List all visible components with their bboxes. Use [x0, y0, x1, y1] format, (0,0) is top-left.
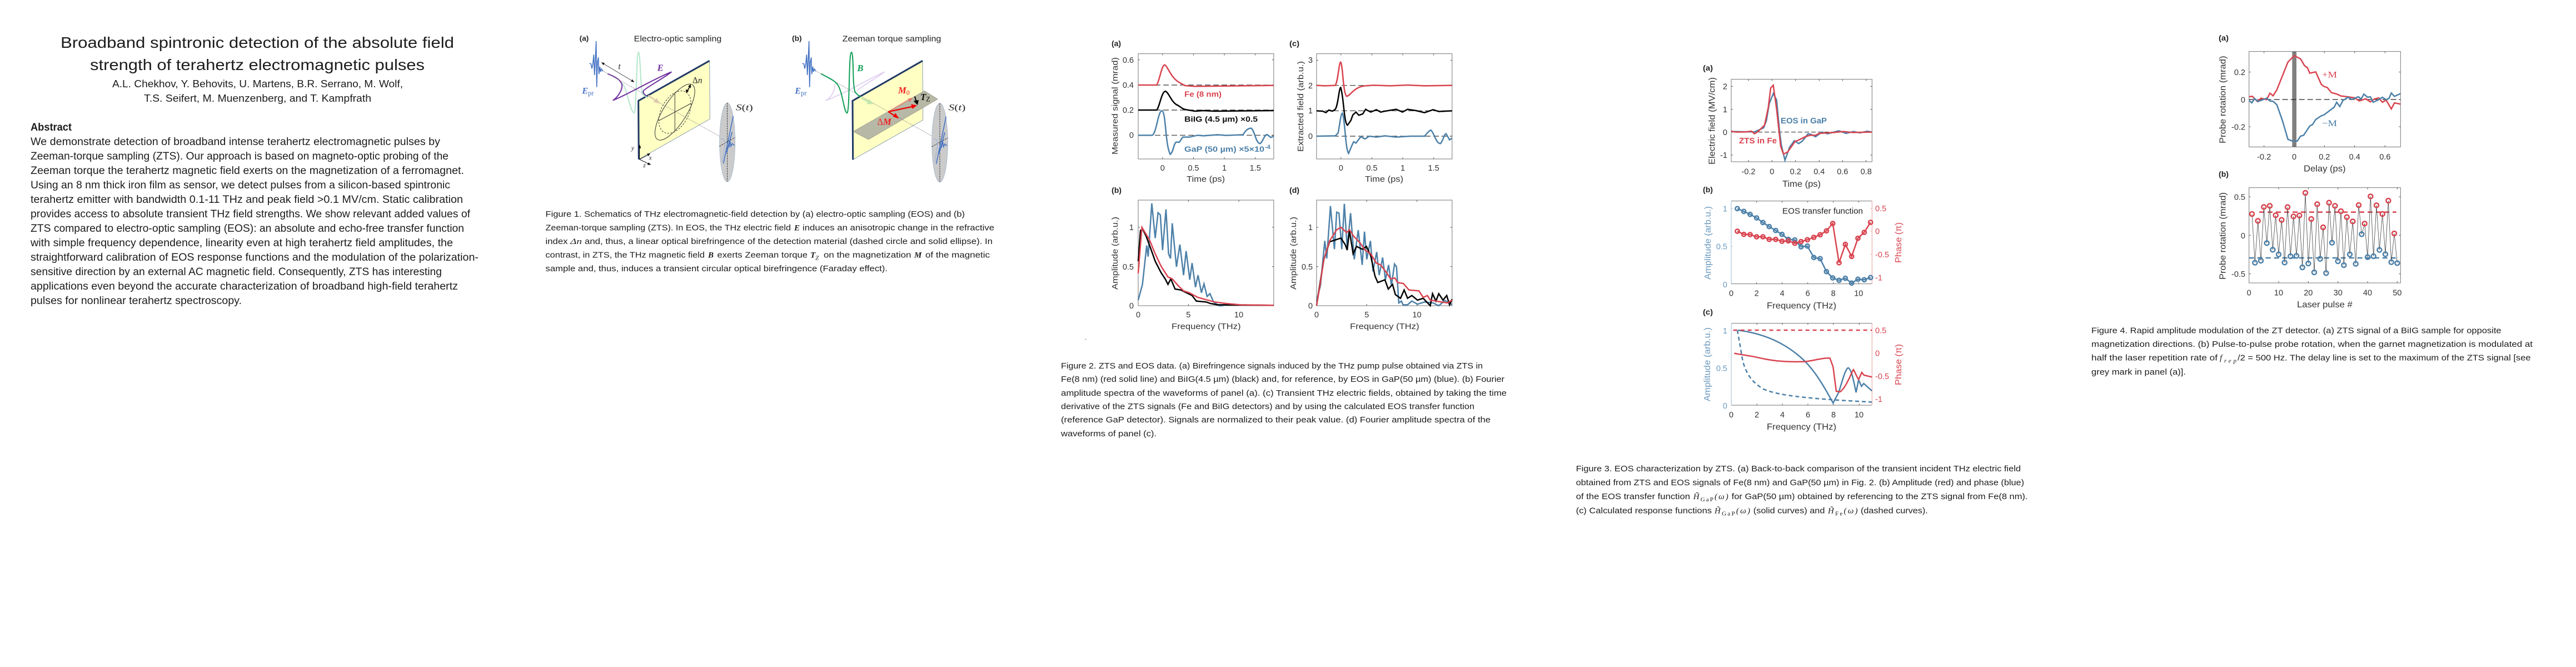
tick labels: 0.5 [1123, 263, 1134, 272]
panel label b: (b) [792, 34, 802, 43]
figure 1 caption: T [810, 251, 816, 260]
right axis label: Phase (π) [1894, 344, 1904, 385]
tick labels: 10 [1854, 289, 1863, 298]
figure 1 caption: M [914, 251, 922, 260]
tick labels: 1 [1222, 164, 1227, 173]
terahertz electric waveform E [607, 72, 671, 101]
figure 3 caption: Fe [1835, 510, 1842, 517]
plot curves [1138, 200, 1274, 306]
figure 2 caption: Figure 2. ZTS and EOS data. (a) Birefringence signals induced by the THz pump pulse obtained via ZTS in [1061, 361, 1483, 371]
tick labels: 0.5 [1716, 242, 1727, 251]
figure 3 caption: for GaP(50 µm) obtained by referencing to the ZTS signal from Fe(8 nm). [1732, 492, 2027, 501]
plot curves [2249, 188, 2400, 283]
plot curves [1731, 201, 1872, 285]
tick labels: 1.5 [1250, 164, 1261, 173]
figure 1 caption: exerts Zeeman torque [717, 250, 808, 260]
terahertz magnetic waveform, faint [622, 52, 649, 113]
tick labels: -1 [1875, 273, 1882, 282]
tick labels: 0 [1723, 281, 1727, 290]
arrow: thz pulse direction [649, 96, 660, 104]
arrow: Zeeman torque [914, 96, 919, 105]
curve label BiIG: BiIG (4.5 µm) ×0.5 [1184, 115, 1258, 123]
figure 2 caption [1060, 361, 1507, 439]
figure 3 caption: H̃ [1715, 507, 1721, 516]
panel label: (a) [2219, 33, 2229, 42]
tick labels [1716, 205, 1889, 298]
tick labels: 0.2 [2319, 153, 2330, 162]
label E: E [657, 63, 664, 73]
figure 2 panel (d): amplitude spectra [1289, 186, 1452, 331]
tick labels: 0.2 [1123, 106, 1134, 115]
index ellipse and circle [648, 78, 702, 146]
tick labels: -0.5 [1875, 251, 1889, 260]
figure 3 caption: H̃ [1828, 507, 1834, 516]
tick labels: 0 [1308, 302, 1313, 311]
figure 1 caption: contrast, in ZTS, the THz magnetic field [546, 250, 705, 260]
right axis label: Phase (π) [1894, 222, 1904, 263]
tick labels: 0.4 [2349, 153, 2360, 162]
abstract text: sensitive direction by an external AC magnetic field. Consequently, ZTS has interesting [31, 266, 442, 278]
figure 3 caption: of the EOS transfer function [1576, 492, 1690, 501]
label Tz: Z [926, 96, 930, 103]
tick labels: 6 [1806, 289, 1810, 298]
tick labels: 0.6 [2379, 153, 2390, 162]
detector plate [639, 61, 710, 160]
abstract text: straightforward calibration of EOS response functions and the modulation of the polarization- [31, 252, 479, 263]
arrow: thz pulse direction [861, 98, 873, 104]
authors: T.S. Seifert, M. Muenzenberg, and T. Kampfrath [144, 93, 371, 104]
tick labels: 1 [1308, 223, 1313, 232]
tick labels: 0.5 [1366, 164, 1377, 173]
figure 1 caption: on the magnetization [824, 250, 911, 260]
tick labels: 0 [2247, 289, 2251, 298]
abstract text: ZTS compared to electro-optic sampling (EOS): an absolute and echo-free transfer function [31, 223, 464, 235]
tick labels: 2 [1308, 82, 1313, 91]
left axis label: Amplitude (arb.u.) [1703, 206, 1713, 280]
figure 3 caption: (dashed curves). [1861, 506, 1928, 516]
figure 1 caption: Zeeman-torque sampling (ZTS). In EOS, the THz electric field [546, 223, 791, 232]
tick labels: 0.5 [2234, 193, 2245, 202]
coordinate axes: z [642, 162, 646, 169]
signal disc [719, 103, 735, 182]
plot curves [1138, 54, 1274, 159]
tick labels: 5 [1364, 311, 1369, 320]
tick labels: 1 [1723, 205, 1727, 213]
label B: B [856, 63, 863, 73]
tick labels: 0 [1875, 227, 1880, 236]
y axis label: Measured signal (mrad) [1110, 57, 1120, 155]
abstract text: pulses for nonlinear terahertz spectroscopy. [31, 295, 242, 307]
x axis label: Time (ps) [1365, 175, 1403, 184]
tick labels: 8 [1831, 289, 1836, 298]
curve label Fe: Fe (8 nm) [1184, 89, 1222, 98]
panel label a: (a) [580, 34, 589, 43]
panel label: (b) [2219, 170, 2229, 178]
figure 2 panel (b): amplitude spectra [1110, 186, 1274, 331]
figure 3 panel (a): electric field [1703, 63, 1872, 189]
tick labels: 0.5 [1875, 205, 1886, 213]
tick labels: 0 [1160, 164, 1165, 173]
x axis label: Time (ps) [1782, 180, 1821, 189]
label delta n: Δn [692, 76, 702, 85]
figure 3 panel (c): response functions [1703, 307, 1904, 432]
stray dot [1085, 339, 1086, 340]
arrow: delta n [686, 84, 691, 93]
curve label EOS: EOS in GaP [1781, 117, 1827, 126]
figure 4 caption: Figure 4. Rapid amplitude modulation of the ZT detector. (a) ZTS signal of a BiIG sample for opposite [2091, 326, 2502, 336]
figure 3 caption: (solid curves) and [1753, 506, 1825, 516]
magnetic sample strip [853, 91, 938, 140]
panel label: (c) [1703, 307, 1713, 316]
tick labels: 0.2 [1790, 168, 1801, 177]
tick labels: 0 [1770, 168, 1774, 177]
abstract text: terahertz emitter with bandwidth 0.1-11 THz and peak field >0.1 MV/cm. Static calibration [31, 194, 463, 206]
figure 1 caption: index [546, 237, 568, 246]
label E probe: pr [801, 89, 807, 97]
tick labels: 5 [1186, 311, 1190, 320]
tick labels: 1 [1401, 164, 1405, 173]
tick labels: 6 [1806, 411, 1810, 420]
figure 3 caption: GaP [1722, 510, 1735, 517]
title [61, 34, 454, 73]
plot curves [1317, 200, 1452, 306]
figure 4 caption [2091, 326, 2533, 377]
figure 2 panel (c): extracted field [1289, 39, 1452, 184]
tick labels: -0.2 [2231, 123, 2245, 132]
plot curves [1731, 323, 1872, 405]
coordinate axes: x [649, 155, 652, 161]
terahertz electric waveform, faint [825, 72, 885, 101]
tick labels: 0.6 [1123, 56, 1134, 65]
label t: t [618, 62, 621, 71]
tick labels: 40 [2363, 289, 2372, 298]
figure 1 caption: of the magnetic [925, 250, 990, 260]
tick labels: 0 [2241, 96, 2245, 104]
curve label ZTS: ZTS in Fe [1739, 137, 1777, 146]
tick labels: -0.5 [2231, 270, 2245, 279]
figure 3 caption: (ω) [1843, 507, 1857, 516]
tick labels: 4 [1780, 411, 1785, 420]
plot curves [1317, 54, 1452, 159]
tick labels: 0 [1129, 131, 1134, 140]
y axis label: Amplitude (arb.u.) [1110, 217, 1120, 290]
figure 2 caption: waveforms of panel (c). [1060, 429, 1157, 439]
tick labels [1123, 56, 1261, 173]
curve label minus M: −M [2322, 119, 2337, 128]
y axis label: Extracted field (arb.u.) [1296, 61, 1306, 152]
panel title: Electro-optic sampling [634, 34, 721, 44]
figure 3 caption: obtained from ZTS and EOS signals of Fe(8 nm) and GaP(50 µm) in Fig. 2. (b) Amplitude (red) and phase (blue) [1576, 478, 2024, 487]
figure 4 caption: f [2220, 354, 2222, 362]
left axis label: Amplitude (arb.u.) [1703, 327, 1712, 401]
inset label: EOS transfer function [1782, 207, 1863, 216]
tick labels [1302, 223, 1422, 320]
tick labels: 10 [1234, 311, 1243, 320]
figure 2 caption: derivative of the ZTS signals (Fe and BiIG detectors) and by using the calculated EOS transfer function [1061, 402, 1474, 411]
abstract text: applications even beyond the accurate characterization of broadband high-field terahertz [31, 281, 458, 292]
tick labels: 1 [1308, 107, 1313, 116]
figure 3 caption [1576, 464, 2027, 517]
tick labels: 2 [1755, 289, 1759, 298]
probe pulse waveform [803, 41, 816, 87]
tick labels: 0 [2241, 232, 2245, 241]
x axis label: Frequency (THz) [1767, 301, 1836, 311]
signal disc [932, 103, 948, 182]
abstract heading: Abstract [31, 122, 72, 133]
tick labels: 10 [2274, 289, 2283, 298]
x axis label: Time (ps) [1187, 175, 1225, 184]
panel label: (d) [1289, 186, 1299, 195]
figure 3 caption: H̃ [1693, 492, 1700, 501]
tick labels: 30 [2334, 289, 2343, 298]
figure 3 caption: GaP [1701, 496, 1713, 503]
tick labels: 0.5 [1716, 365, 1727, 374]
tick labels: 0 [1308, 132, 1313, 141]
y axis label: Amplitude (arb.u.) [1289, 217, 1298, 290]
figure 4 caption: grey mark in panel (a)]. [2091, 367, 2186, 377]
panel label: (a) [1112, 39, 1121, 48]
label M0: 0 [906, 88, 910, 96]
y axis label: Electric field (MV/cm) [1707, 77, 1717, 165]
tick labels: 8 [1831, 411, 1836, 420]
figure 1 caption: E [794, 223, 800, 232]
tick labels: 0.4 [1813, 168, 1825, 177]
probe beam path [813, 69, 937, 139]
tick labels: -1 [1875, 395, 1882, 404]
figure 2 caption: Fe(8 nm) (red solid line) and BiIG(4.5 µm) (black) and, for reference, by EOS in GaP(50 µm) (blue). (b) Fourier [1061, 375, 1504, 384]
plot curves [1731, 79, 1872, 162]
abstract text: Using an 8 nm thick iron film as sensor, we detect pulses from a silicon-based spintronic [31, 180, 450, 191]
figure 1 panel (b): zeeman torque sampling schematic [792, 34, 965, 182]
panel label: (b) [1112, 186, 1122, 195]
label S(t): S(t) [949, 103, 965, 113]
figure 4 caption: rep [2224, 358, 2236, 365]
tick labels: 50 [2393, 289, 2401, 298]
figure 3 caption: (c) Calculated response functions [1576, 506, 1712, 516]
curve label GaP: -4 [1265, 144, 1271, 151]
figure 3 panel (b): EOS transfer function [1703, 185, 1904, 311]
label M0: M [898, 85, 907, 96]
tick labels: 0 [1723, 128, 1727, 137]
x axis label: Delay (ps) [2304, 165, 2345, 173]
tick labels: 10 [1412, 311, 1422, 320]
abstract text: with simple frequency dependence, linearity even at high terahertz field amplitudes, the [30, 237, 453, 249]
tick labels: 3 [1308, 56, 1313, 65]
label Tz: T [920, 92, 926, 102]
tick labels: 0.6 [1837, 168, 1848, 177]
tick labels: 0 [1729, 411, 1733, 420]
panel title: Zeeman torque sampling [843, 34, 941, 44]
abstract text [30, 136, 479, 307]
x axis label: Frequency (THz) [1350, 322, 1419, 331]
figure 1 caption: Figure 1. Schematics of THz electromagnetic-field detection by (a) electro-optic sampling (EOS) and (b) [546, 210, 965, 219]
x axis label: Laser pulse # [2297, 300, 2353, 310]
tick labels: 10 [1855, 411, 1864, 420]
y axis label: Probe rotation (mrad) [2219, 56, 2228, 143]
tick labels: 0.2 [2234, 68, 2245, 77]
figure 4 panel (a): probe rotation versus delay [2219, 33, 2400, 173]
figure 3 caption: Figure 3. EOS characterization by ZTS. (a) Back-to-back comparison of the transient incident THz electric field [1576, 464, 2021, 474]
tick labels: -1 [1720, 151, 1727, 160]
tick labels: -0.2 [2257, 153, 2271, 162]
figure 1 caption: sample and, thus, induces a transient circular optical birefringence (Faraday effect). [546, 264, 888, 273]
abstract text: Zeeman-torque sampling (ZTS). Our approach is based on magneto-optic probing of the [31, 151, 449, 162]
tick labels: 20 [2304, 289, 2313, 298]
curve label plus M: +M [2322, 70, 2337, 80]
coordinate axes: y [631, 145, 635, 152]
panel label: (c) [1289, 39, 1299, 48]
figure 4 caption: /2 = 500 Hz. The delay line is set to the maximum of the ZTS signal [see [2238, 354, 2531, 362]
arrow: delta M [888, 112, 899, 118]
tick labels [1123, 223, 1243, 320]
tick labels: 4 [1780, 289, 1785, 298]
tick labels: 0 [1729, 289, 1733, 298]
tick labels: 1 [1723, 327, 1727, 336]
tick labels [1720, 82, 1872, 177]
tick labels: -0.2 [1742, 168, 1755, 177]
tick labels: 1 [1723, 106, 1727, 115]
figure 4 caption: half the laser repetition rate of [2091, 354, 2218, 362]
tick labels: -0.5 [1875, 372, 1889, 381]
arrow: M0 faded [888, 97, 913, 112]
label E probe: E [581, 86, 588, 96]
figure 1 panel (a): electro-optic sampling schematic [580, 34, 753, 182]
abstract text: provides access to absolute transient THz field strengths. We show relevant added values of [31, 208, 471, 220]
coordinate axes [631, 145, 652, 169]
y axis label: Probe rotation (mrad) [2219, 192, 2228, 280]
tick labels: 0.4 [1123, 81, 1134, 90]
tick labels [2231, 193, 2401, 298]
x axis label: Frequency (THz) [1172, 322, 1240, 331]
figure 1 caption: and, thus, a linear optical birefringence of the detection material (dashed circle and solid ellipse). In [585, 237, 993, 246]
tick labels: 0 [1136, 311, 1140, 320]
tick labels: 0.8 [1861, 168, 1872, 177]
curve label GaP: GaP (50 µm) ×5×10 [1184, 145, 1264, 153]
tick labels: 2 [1723, 82, 1727, 91]
arrow: M main [888, 104, 917, 112]
label E probe: E [794, 86, 801, 96]
label S(t): S(t) [736, 103, 753, 113]
label delta M: ΔM [877, 117, 892, 127]
x axis label: Frequency (THz) [1767, 422, 1836, 432]
figure 4 caption: magnetization directions. (b) Pulse-to-pulse probe rotation, when the garnet magnetization is modulated at [2091, 340, 2533, 349]
figure 2 caption: amplitude spectra of the waveforms of panel (a). (c) Transient THz electric fields, obtained by taking the time [1061, 389, 1507, 398]
figure 2 panel (a): measured signal [1110, 39, 1274, 184]
figure 1 caption: induces an anisotropic change in the refractive [803, 223, 994, 232]
figure 4 panel (b): probe rotation versus laser pulse [2219, 170, 2401, 310]
figure 2 caption: (reference GaP detector). Signals are normalized to their peak value. (d) Fourier amplitude spectra of the [1061, 415, 1491, 425]
terahertz magnetic waveform B [821, 52, 860, 113]
title: strength of terahertz electromagnetic pulses [90, 56, 425, 73]
tick labels: 0 [1339, 164, 1343, 173]
tick labels: 0 [1875, 349, 1880, 358]
figure 3 caption: (ω) [1736, 507, 1750, 516]
probe beam path [600, 69, 724, 139]
tick labels: 0 [1314, 311, 1319, 320]
figure 1 caption: B [707, 251, 714, 260]
authors [112, 78, 403, 104]
abstract text: Zeeman torque the terahertz magnetic field exerts on the magnetization of a ferromagnet. [31, 165, 464, 177]
tick labels: 2 [1755, 411, 1759, 420]
panel label: (a) [1703, 63, 1713, 72]
probe pulse waveform [590, 41, 603, 87]
tick labels: 0.5 [1302, 263, 1313, 272]
figure 1 caption: Z [815, 255, 819, 261]
tick labels: 0 [1129, 302, 1134, 311]
tick labels: 1.5 [1428, 164, 1439, 173]
tick labels: 0.5 [1875, 327, 1886, 336]
authors: A.L. Chekhov, Y. Behovits, U. Martens, B.R. Serrano, M. Wolf, [112, 78, 403, 89]
tick labels [2231, 68, 2390, 162]
tick labels: 1 [1129, 223, 1134, 232]
tick labels [1716, 327, 1889, 420]
tick labels [1308, 56, 1439, 173]
label E probe: pr [588, 89, 594, 97]
tick labels: 0 [1723, 402, 1727, 411]
arrow: delay t [601, 62, 634, 82]
tick labels: 0.5 [1188, 164, 1199, 173]
figure 1 caption [546, 210, 994, 273]
abstract text: We demonstrate detection of broadband intense terahertz electromagnetic pulses by [31, 136, 441, 148]
plot curves [2249, 52, 2400, 147]
panel label: (b) [1703, 185, 1713, 194]
figure 1 caption: Δn [570, 237, 582, 246]
detector plate [853, 61, 923, 160]
tick labels: 0 [2292, 153, 2296, 162]
title: Broadband spintronic detection of the absolute field [61, 34, 454, 51]
figure 3 caption: (ω) [1715, 492, 1728, 501]
